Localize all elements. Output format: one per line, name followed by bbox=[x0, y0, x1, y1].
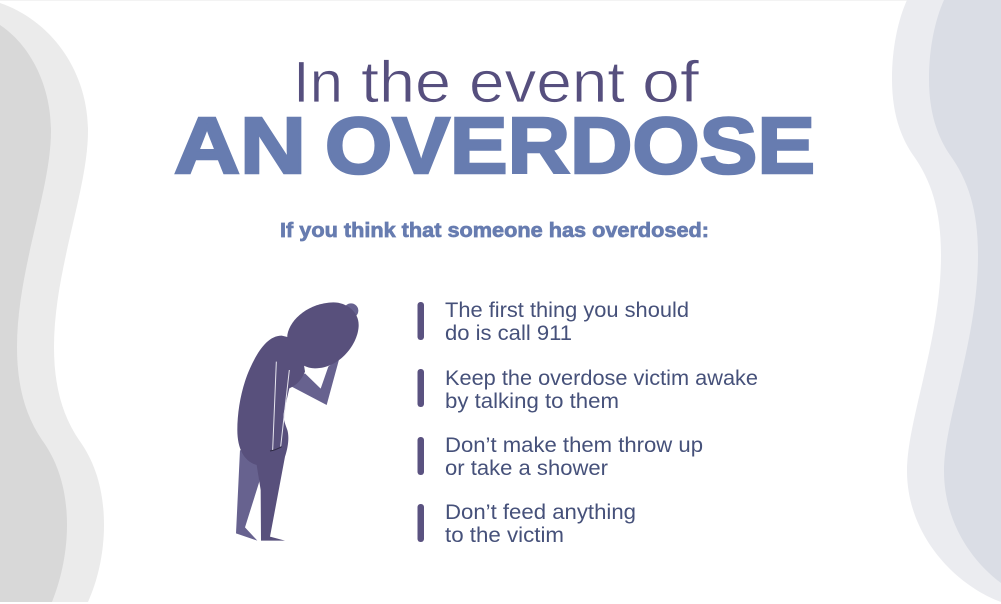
title line 1: of bbox=[642, 50, 700, 115]
item text: Don’t feed anything bbox=[445, 501, 636, 524]
list item 4: to the victim bbox=[445, 524, 564, 547]
item text: The first thing you should bbox=[445, 299, 689, 322]
bullet bar bbox=[418, 437, 424, 475]
list item 2 bbox=[418, 367, 758, 413]
title line 1: event bbox=[469, 50, 625, 115]
head bbox=[287, 302, 359, 368]
decorative wave: left bbox=[0, 3, 104, 602]
arm bbox=[292, 358, 339, 405]
list item 3 bbox=[418, 434, 703, 480]
list item 3: or take a shower bbox=[445, 457, 608, 480]
back leg bbox=[236, 450, 259, 541]
bullet bar bbox=[418, 302, 424, 340]
decorative wave: right bbox=[892, 0, 1001, 602]
title line 1 bbox=[293, 50, 700, 115]
item text: Don’t make them throw up bbox=[445, 434, 703, 457]
title line 2: AN bbox=[174, 101, 306, 190]
figure: person bent over holding head bbox=[236, 302, 359, 541]
arm outline highlights bbox=[270, 362, 289, 451]
list item 1 bbox=[418, 299, 689, 345]
title line 1: In bbox=[293, 50, 343, 115]
list item 1: do is call 911 bbox=[445, 322, 572, 345]
list item 4 bbox=[418, 501, 636, 547]
title line 2: OVERDOSE bbox=[325, 101, 815, 190]
title line 1: the bbox=[361, 50, 451, 115]
bun bbox=[344, 303, 358, 318]
item text: Keep the overdose victim awake bbox=[445, 367, 758, 390]
body and front leg bbox=[237, 336, 305, 541]
bullet bar bbox=[418, 369, 424, 407]
list item 2: by talking to them bbox=[445, 390, 619, 413]
subheading: If you think that someone has overdosed: bbox=[280, 220, 709, 242]
bullet bar bbox=[418, 504, 424, 542]
